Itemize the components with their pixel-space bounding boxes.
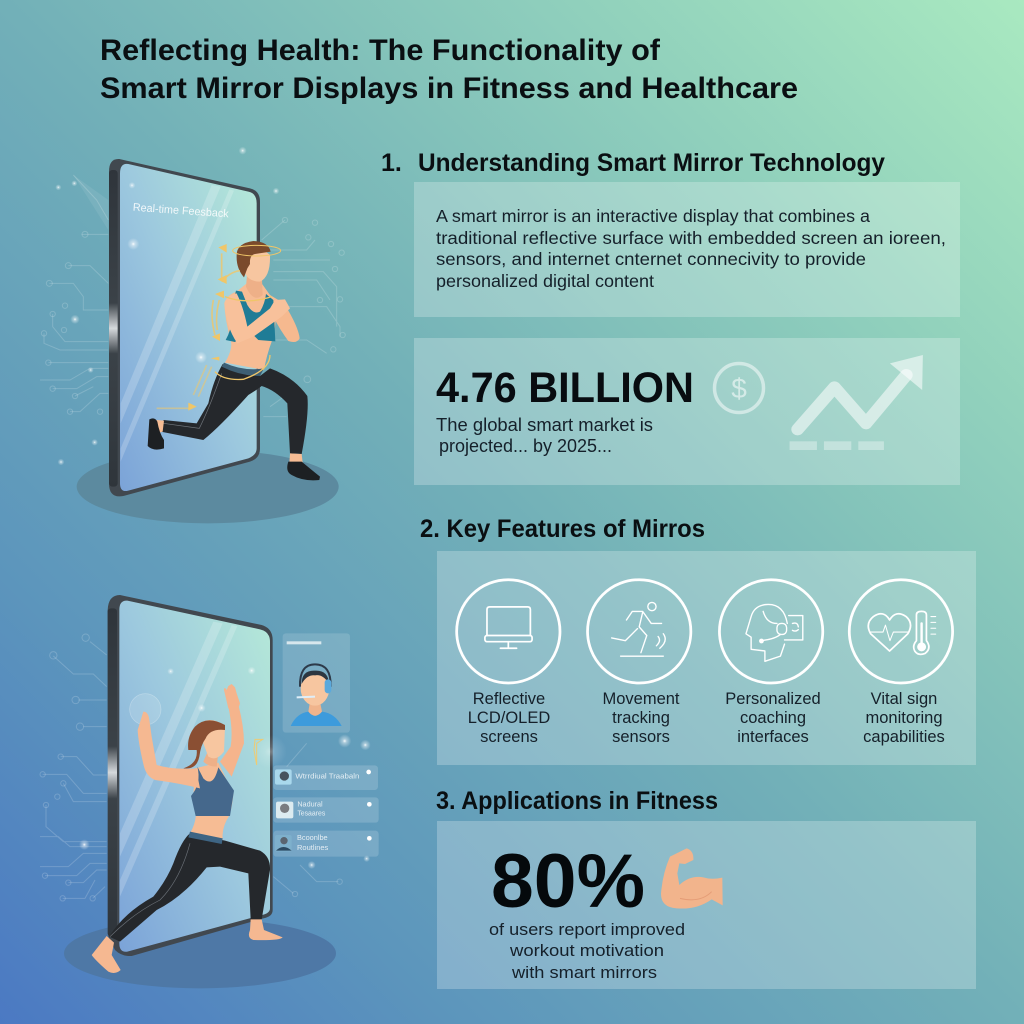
market caption: The global smart market is: [436, 415, 653, 435]
icon: coach head: [719, 580, 823, 683]
circuit lines: [40, 175, 345, 417]
panel: smart mirror definition: traditional reflective surface with embedded screen an ioreen,: [436, 228, 946, 248]
feature labels: LCD/OLED: [468, 709, 550, 727]
feature labels: Movement: [602, 690, 680, 708]
motion tracking arrows: [157, 244, 281, 411]
coach card: [283, 633, 350, 733]
reflection streaks: [121, 185, 221, 423]
glow sparkles: [79, 667, 371, 869]
section 1 heading: 1.: [381, 149, 402, 177]
panel: smart mirror definition: personalized digital content: [436, 271, 654, 291]
icon: runner: [588, 580, 691, 683]
coaching list: Bcoonlbe: [297, 833, 328, 842]
panel: smart mirror definition: [414, 182, 960, 317]
feature labels: interfaces: [737, 728, 809, 746]
reflection streaks: [120, 622, 223, 857]
icon: dollar coin: $: [731, 373, 747, 404]
panel: market stat: [414, 338, 960, 485]
section 2 heading: 2. Key Features of Mirros: [420, 515, 705, 543]
icon: growth arrow: [790, 355, 923, 450]
coaching list: Routlines: [297, 843, 329, 852]
mirror screen: [120, 164, 257, 491]
lunging woman: [92, 684, 283, 973]
circuit lines: [40, 634, 342, 901]
panel: smart mirror definition: sensors, and internet cnternet connecivity to provide: [436, 249, 866, 269]
lunging man: [148, 241, 320, 480]
glow sparkles: [55, 147, 279, 465]
title: Reflecting Health: The Functionality of: [100, 34, 661, 67]
feature labels: capabilities: [863, 728, 945, 746]
market value: 4.76 BILLION: [436, 364, 694, 412]
icon: screen: [457, 580, 560, 683]
coaching list: Wtrrdiual Traabaln: [295, 771, 359, 780]
market caption: [436, 415, 653, 456]
stat caption: of users report improved: [489, 921, 685, 939]
feature labels: tracking: [612, 709, 670, 727]
feature icons: [457, 580, 953, 683]
coaching list: Nadural: [297, 799, 323, 808]
gesture ring: [130, 694, 161, 725]
feature labels: Reflective: [473, 690, 545, 708]
icon: heart and thermometer: [849, 580, 953, 683]
stat caption: with smart mirrors: [511, 964, 657, 982]
feature labels: monitoring: [865, 709, 943, 727]
mirror frame: [109, 159, 260, 496]
feature labels: screens: [480, 728, 538, 746]
market caption: projected... by 2025...: [439, 436, 612, 456]
feature labels: coaching: [740, 709, 806, 727]
icon: flexed bicep: [661, 848, 723, 909]
feature labels: sensors: [612, 728, 670, 746]
feature labels: [468, 690, 945, 746]
stat value: 80%: [491, 839, 645, 924]
floor shadow: [64, 918, 336, 988]
section 3 heading: 3. Applications in Fitness: [436, 787, 718, 815]
mirror screen: [119, 601, 270, 952]
mirror label: Real-time Feesback: [132, 202, 230, 220]
panel: key features: [437, 551, 976, 765]
floor shadow: [77, 450, 339, 523]
illustration: man lunging at smart mirror: [40, 147, 345, 523]
title: Smart Mirror Displays in Fitness and Healthcare: [100, 72, 798, 105]
coaching list: Tesaares: [297, 809, 326, 818]
feature labels: Vital sign: [871, 690, 937, 708]
illustration: woman at coaching mirror: [40, 595, 379, 988]
coaching list: [273, 765, 379, 857]
stat caption: [489, 921, 685, 982]
panel: smart mirror definition: A smart mirror is an interactive display that combines a: [436, 206, 870, 226]
panel: fitness stat: [437, 821, 976, 989]
stat caption: workout motivation: [509, 942, 664, 960]
feature labels: Personalized: [725, 690, 821, 708]
icon: dollar coin: [714, 364, 764, 412]
mirror frame: [108, 595, 273, 956]
title: [100, 34, 798, 105]
section 1 heading: Understanding Smart Mirror Technology: [418, 149, 885, 177]
